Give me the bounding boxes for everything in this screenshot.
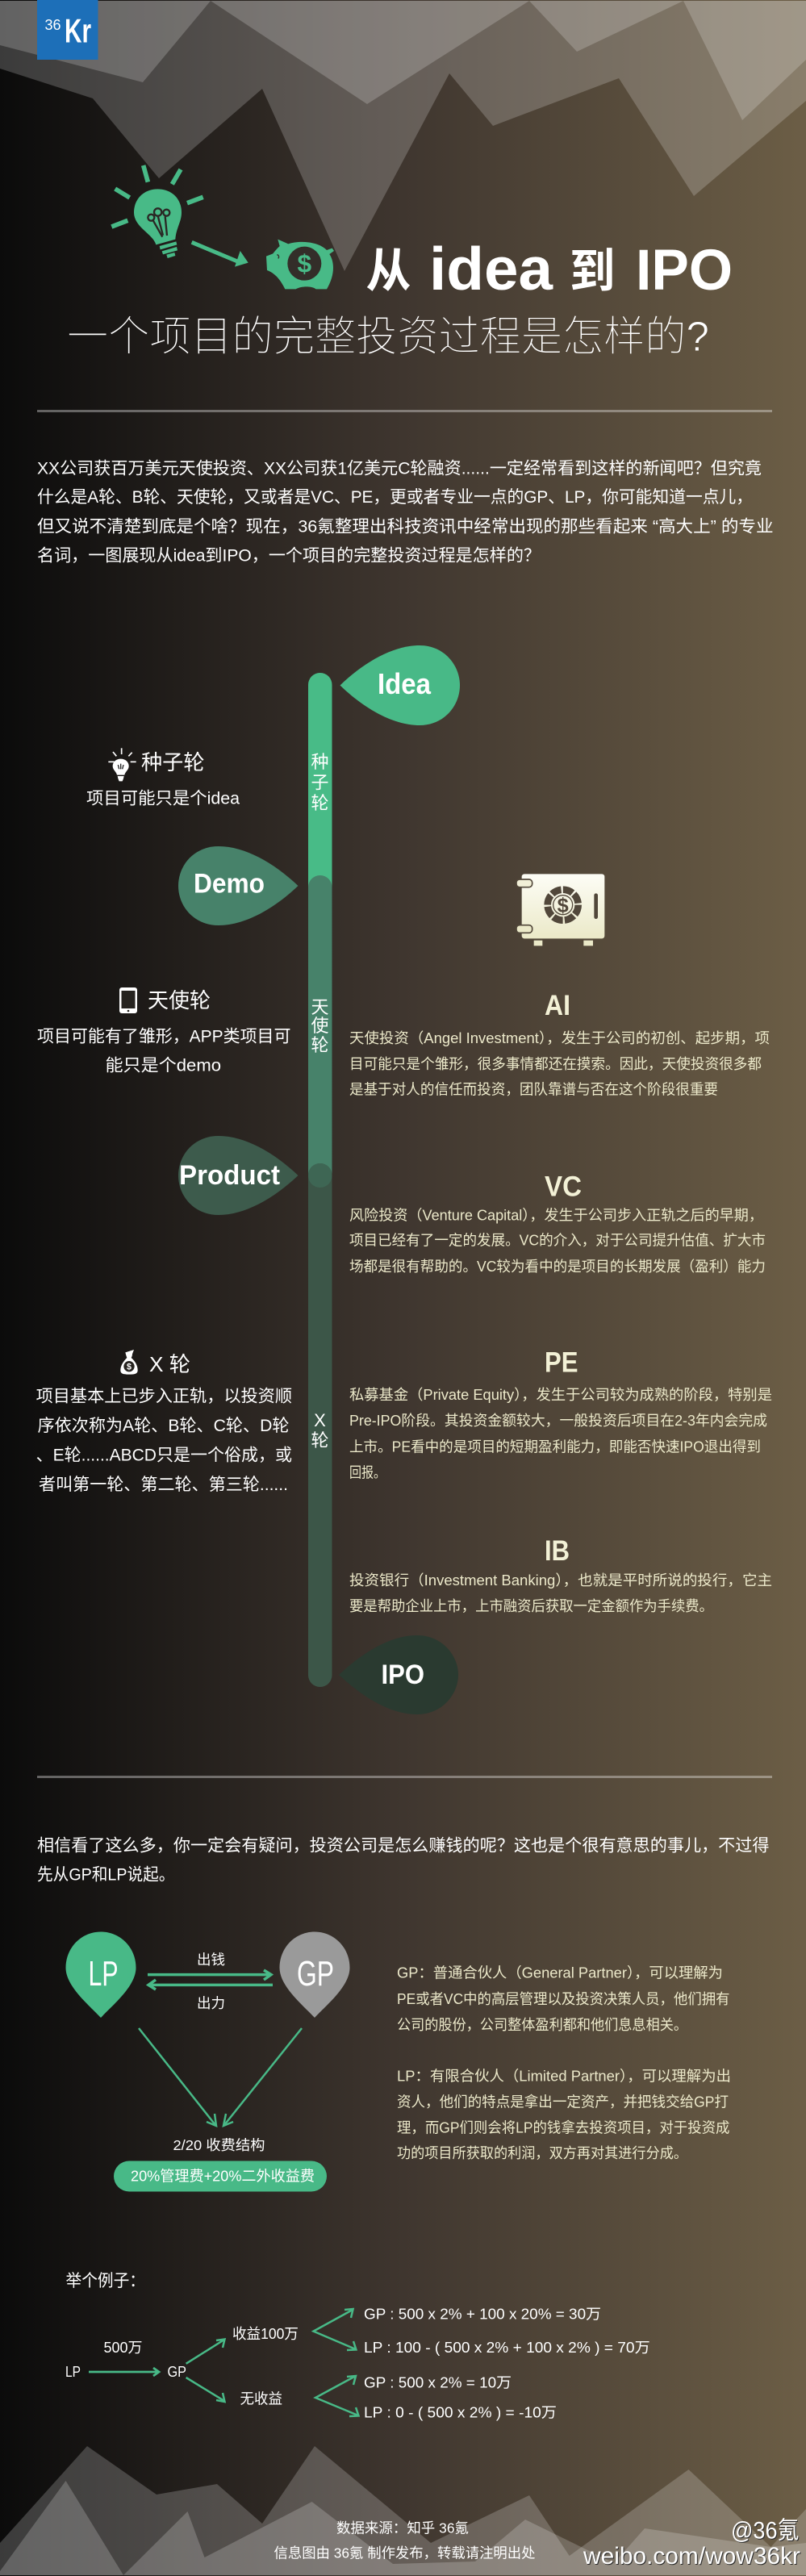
icon: small bulb <box>108 748 136 781</box>
description: 回报。 <box>349 1465 386 1481</box>
title: idea <box>429 235 553 303</box>
results: LP : 0 - ( 500 x 2% ) = -10万 <box>364 2404 557 2420</box>
results: GP : 500 x 2% = 10万 <box>364 2375 512 2391</box>
description: 目可能只是个雏形，很多事情都还在摸索。因此，天使投资很多都 <box>349 1056 762 1072</box>
label: 出钱: 出钱 <box>197 1952 225 1968</box>
panel: seed round <box>86 748 240 808</box>
bar label: X轮: 轮 <box>311 1430 329 1451</box>
marker: Product: Product <box>179 1160 280 1191</box>
text: LP definition: LP：有限合伙人（Limited Partner），可以理解为出 <box>397 2069 731 2085</box>
bar label: 种子轮: 种 <box>311 752 329 772</box>
subtitle: 一个项目的完整投资过程是怎样的? <box>67 314 709 361</box>
diagram: example flow <box>65 2306 650 2420</box>
results: GP : 500 x 2% + 100 x 20% = 30万 <box>364 2306 601 2322</box>
intro text: 但又说不清楚到底是个啥？现在，36氪整理出科技资讯中经常出现的那些看起来 “高大上” 的专业 <box>37 518 773 536</box>
icon: safe <box>516 874 604 946</box>
icon: money bag <box>120 1350 138 1375</box>
description: 天使投资（Angel Investment），发生于公司的初创、起步期，项 <box>349 1030 770 1046</box>
heading: AI <box>545 990 570 1021</box>
bar label: X轮: X <box>314 1410 326 1430</box>
panel: AI <box>349 990 770 1097</box>
bottom mountains <box>0 2446 806 2575</box>
icon: piggy bank <box>266 240 334 289</box>
pill: fee: 20%管理费+20%二外收益费 <box>131 2169 315 2185</box>
logo: 36Kr <box>37 0 98 60</box>
title: 到 <box>570 245 615 298</box>
text: LP definition <box>397 2069 731 2161</box>
arrows: profit split <box>313 2309 356 2350</box>
divider <box>37 410 772 412</box>
text: LP definition: 功的项目所获取的利润，双方再对其进行分成。 <box>397 2145 687 2161</box>
timeline bar <box>308 673 332 1687</box>
description <box>349 1387 772 1481</box>
node: GP: GP <box>297 1954 334 1994</box>
arrow: LP to fee <box>139 2028 216 2126</box>
heading: VC <box>545 1171 582 1202</box>
bar label: 种子轮: 轮 <box>311 793 329 813</box>
footer: weibo: weibo.com/wow36kr <box>583 2543 800 2570</box>
footer: source and credit: 数据来源：知乎 36氪 <box>336 2520 469 2536</box>
description <box>349 1030 770 1097</box>
node: GP <box>279 1931 350 2018</box>
title <box>366 235 733 303</box>
node: LP: LP <box>89 1954 118 1994</box>
intro text: 什么是A轮、B轮、天使轮，又或者是VC、PE，更或者专业一点的GP、LP，你可能知道一点儿， <box>37 488 753 507</box>
text: GP definition <box>397 1965 729 2033</box>
description: 是基于对人的信任而投资，团队靠谱与否在这个阶段很重要 <box>349 1081 718 1097</box>
description <box>349 1572 772 1614</box>
description: 要是帮助企业上市，上市融资后获取一定金额作为手续费。 <box>349 1598 713 1614</box>
title: IPO <box>636 239 733 303</box>
description: 者叫第一轮、第二轮、第三轮...... <box>39 1476 288 1494</box>
marker: IPO: IPO <box>381 1660 424 1690</box>
intro text: 名词，一图展现从idea到IPO，一个项目的完整投资过程是怎样的？ <box>37 547 541 565</box>
panel: X round <box>36 1350 292 1494</box>
icon: piggy bank: $ <box>298 249 312 278</box>
marker: Product <box>178 1136 299 1215</box>
marker: IPO <box>339 1635 458 1714</box>
heading: 种子轮 <box>141 750 205 774</box>
marker: Demo <box>178 846 299 925</box>
description: 项目可能有了雏形，APP类项目可 <box>37 1028 290 1046</box>
question text: 先从GP和LP说起。 <box>37 1865 174 1885</box>
arrows: GP to outcomes <box>186 2340 224 2402</box>
description: 项目可能只是个idea <box>86 789 240 808</box>
intro text <box>37 460 773 565</box>
description: 风险投资（Venture Capital），发生于公司步入正轨之后的早期， <box>349 1207 763 1223</box>
arrow: idea to money <box>192 242 248 267</box>
node: LP <box>66 1931 136 2018</box>
footer: source and credit <box>274 2520 536 2561</box>
pill: fee <box>114 2161 327 2191</box>
heading: 天使轮 <box>148 988 211 1012</box>
arrow: LP to GP <box>148 1970 271 1980</box>
logo: 36Kr: Kr <box>65 11 91 50</box>
description: 能只是个demo <box>105 1057 221 1075</box>
description: 、E轮......ABCD只是一个俗成，或 <box>36 1446 292 1465</box>
bar label: 天使轮: 轮 <box>311 1035 329 1055</box>
label: 无收益: 无收益 <box>240 2391 282 2407</box>
arrow: GP to LP <box>148 1980 273 1989</box>
description: 投资银行（Investment Banking），也就是平时所说的投行，它主 <box>349 1572 772 1589</box>
description: 场都是很有帮助的。VC较为看中的是项目的长期发展（盈利）能力 <box>349 1259 766 1275</box>
description <box>36 1388 292 1494</box>
text: LP definition: 理，而GP们则会将LP的钱拿去投资项目，对于投资成 <box>397 2119 729 2136</box>
description: 上市。PE看中的是项目的短期盈利能力，即能否快速IPO退出得到 <box>349 1439 761 1455</box>
heading: PE <box>545 1347 578 1378</box>
results <box>364 2306 650 2420</box>
description <box>349 1207 766 1275</box>
label: 500万: 500万 <box>103 2340 142 2356</box>
description: Pre-IPO阶段。其投资金额较大，一般投资后项目在2-3年内会完成 <box>349 1413 767 1429</box>
marker: Idea: Idea <box>378 667 432 700</box>
text: GP definition: PE或者VC中的高层管理以及投资决策人员，他们拥有 <box>397 1991 729 2007</box>
label: 出力: 出力 <box>197 1995 225 2011</box>
diagram: LP and GP fee structure <box>66 1931 350 2191</box>
marker: Idea <box>340 645 460 725</box>
panel: angel round <box>37 987 290 1075</box>
marker: Demo: Demo <box>194 868 265 899</box>
question text: 相信看了这么多，你一定会有疑问，投资公司是怎么赚钱的呢？这也是个很有意思的事儿，不过得 <box>37 1836 770 1856</box>
bar label: 天使轮: 使 <box>311 1016 329 1036</box>
title: 从 <box>366 245 411 298</box>
arrow: LP to GP <box>89 2368 159 2376</box>
icon: safe: $ <box>558 895 569 917</box>
text: GP definition: 公司的股份，公司整体盈利都和他们息息相关。 <box>397 2017 687 2033</box>
label: LP: LP <box>65 2364 81 2380</box>
heading: X 轮 <box>149 1352 190 1376</box>
icon: light bulb <box>111 165 203 258</box>
description: 项目已经有了一定的发展。VC的介入，对于公司提升估值、扩大市 <box>349 1233 766 1249</box>
description <box>37 1028 290 1075</box>
description: 私募基金（Private Equity），发生于公司较为成熟的阶段，特别是 <box>349 1387 772 1403</box>
panel: PE <box>349 1347 772 1481</box>
heading: IB <box>545 1535 570 1567</box>
intro text: XX公司获百万美元天使投资、XX公司获1亿美元C轮融资......一定经常看到这样的新闻吧？但究竟 <box>37 460 762 478</box>
label: GP: GP <box>168 2364 186 2380</box>
icon: phone <box>119 987 137 1013</box>
footer: weibo <box>583 2517 800 2570</box>
footer: source and credit: 信息图由 36氪 制作发布，转载请注明出处 <box>274 2545 536 2561</box>
logo: 36Kr: 36 <box>45 17 61 33</box>
label: 收益100万: 收益100万 <box>232 2326 299 2342</box>
text: GP definition: GP：普通合伙人（General Partner），可以理解为 <box>397 1965 723 1981</box>
icon: money bag: $ <box>127 1363 132 1372</box>
arrows: no-profit split <box>315 2376 358 2416</box>
label: fee structure: 2/20 收费结构 <box>173 2137 265 2153</box>
panel: VC <box>349 1171 766 1275</box>
description: 序依次称为A轮、B轮、C轮、D轮 <box>37 1417 290 1435</box>
top mountains <box>0 1 806 271</box>
arrow: GP to fee <box>223 2028 302 2126</box>
divider <box>37 1776 772 1778</box>
heading: example: 举个例子： <box>66 2272 145 2290</box>
bar label: 天使轮: 天 <box>311 997 329 1017</box>
panel: IB <box>349 1535 772 1614</box>
footer: weibo: @36氪 <box>731 2517 799 2545</box>
results: LP : 100 - ( 500 x 2% + 100 x 2% ) = 70万 <box>364 2340 650 2356</box>
text: LP definition: 资人，他们的特点是拿出一定资产，并把钱交给GP打 <box>397 2093 729 2110</box>
question text <box>37 1836 770 1885</box>
bar label: 种子轮: 子 <box>311 773 329 792</box>
description: 项目基本上已步入正轨，以投资顺 <box>36 1388 292 1405</box>
